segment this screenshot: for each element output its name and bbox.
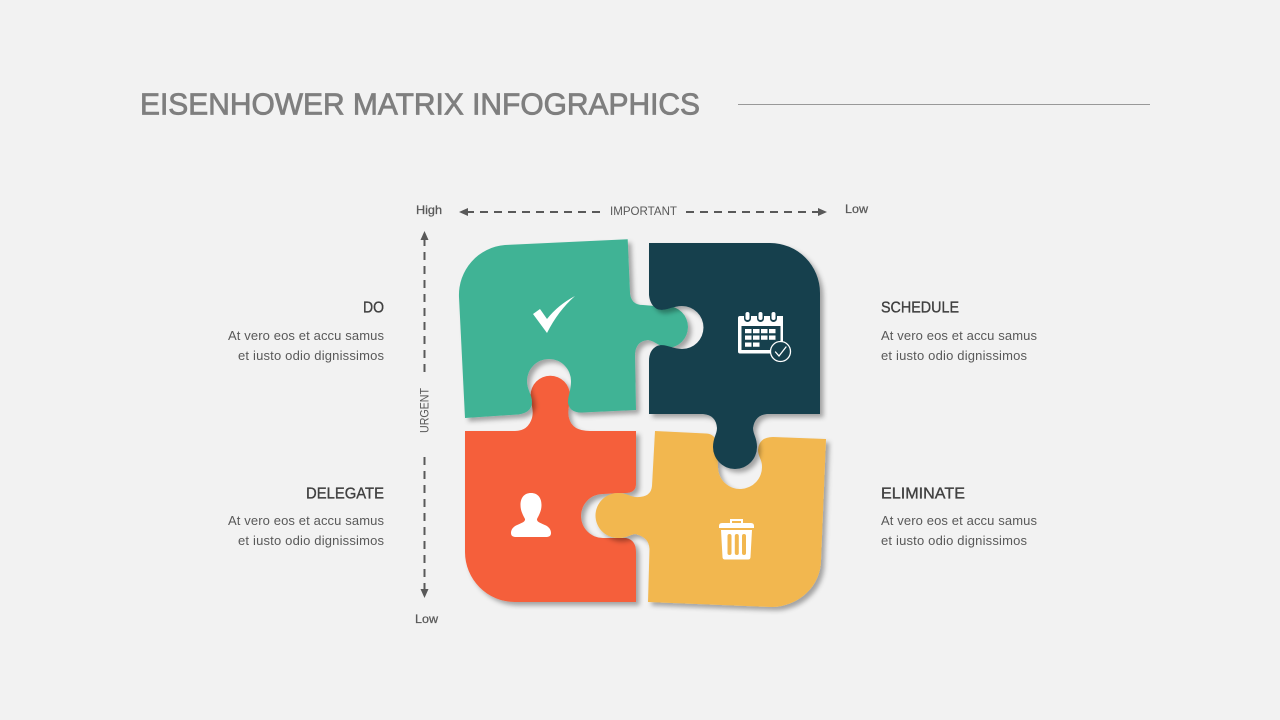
axis: urgent: Low	[415, 612, 438, 626]
icon: person	[511, 493, 551, 537]
puzzle piece: do (green)	[459, 239, 688, 418]
axis: important: IMPORTANT	[610, 204, 678, 218]
text block: do: At vero eos et accu samus	[228, 328, 384, 343]
text block: delegate: At vero eos et accu samus	[228, 513, 384, 528]
text block: delegate: et iusto odio dignissimos	[238, 533, 384, 548]
puzzle piece: delegate (orange)	[465, 376, 636, 602]
axis: urgent: URGENT	[418, 387, 432, 433]
axis: important	[416, 202, 868, 218]
puzzle piece: eliminate (yellow)	[596, 431, 826, 607]
text block: delegate: DELEGATE	[306, 486, 384, 502]
puzzle piece: schedule (navy)	[649, 243, 820, 469]
icon: check mark	[533, 296, 575, 333]
text block: schedule: SCHEDULE	[881, 300, 959, 316]
text block: schedule: et iusto odio dignissimos	[881, 348, 1028, 363]
title: EISENHOWER MATRIX INFOGRAPHICS	[140, 86, 700, 122]
axis: urgent	[415, 231, 438, 626]
text block: eliminate: ELIMINATE	[881, 486, 965, 502]
text block: eliminate	[881, 486, 1038, 548]
icon: trash can	[719, 519, 754, 560]
text block: eliminate: et iusto odio dignissimos	[881, 533, 1028, 548]
text block: schedule	[881, 300, 1038, 363]
axis: important: High	[416, 203, 442, 217]
text block: do: et iusto odio dignissimos	[238, 348, 384, 363]
text block: do	[228, 300, 384, 363]
text block: do: DO	[363, 300, 384, 316]
text block: schedule: At vero eos et accu samus	[881, 328, 1038, 343]
text block: delegate	[228, 486, 384, 548]
axis: important: Low	[845, 202, 868, 216]
icon: calendar with check	[738, 311, 790, 362]
text block: eliminate: At vero eos et accu samus	[881, 513, 1038, 528]
